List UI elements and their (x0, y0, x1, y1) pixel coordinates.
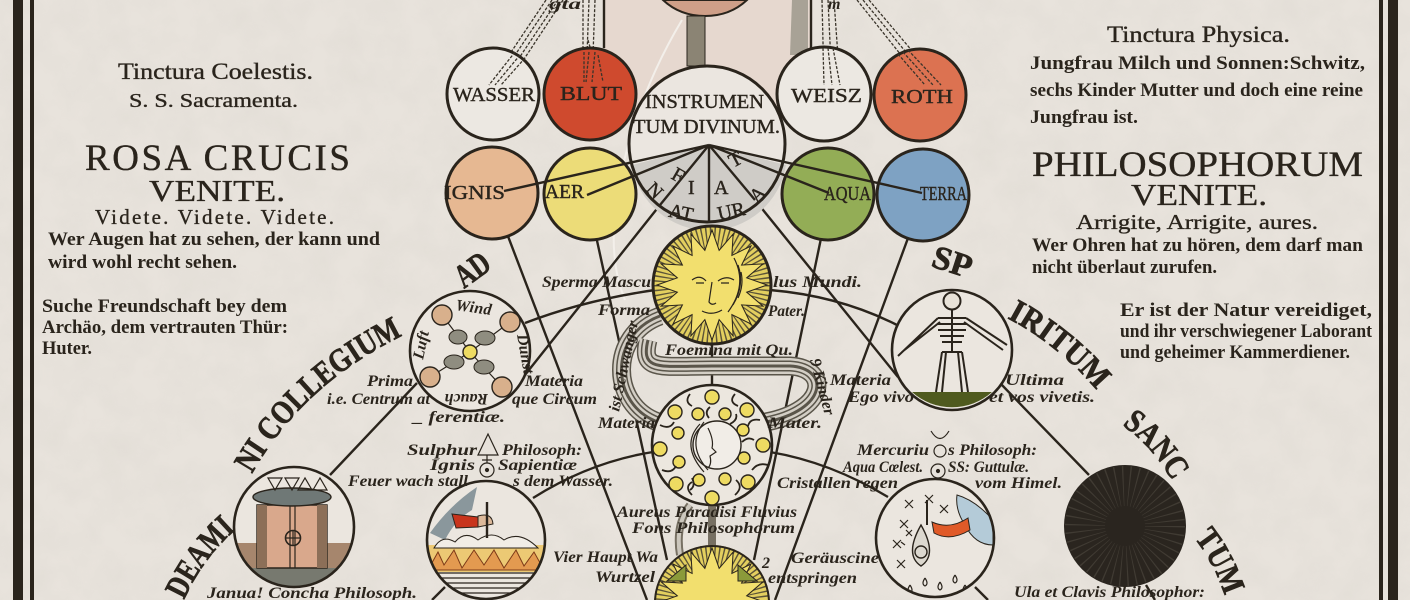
FIAT NATURA letters: T (725, 147, 746, 172)
text block: Wer Ohren: nicht überlaut zurufen. (1032, 257, 1217, 278)
double border right (1379, 0, 1398, 600)
neck column (687, 16, 705, 66)
text block: Jungfrau Milch: Jungfrau Milch und Sonnen:Schwitz, (1030, 53, 1365, 74)
heading: Tinctura Physica: Tinctura Physica. (1107, 22, 1290, 47)
labels at the skeleton circle: Ego vivo (847, 389, 914, 406)
text block: Er ist der Natur (1120, 300, 1373, 363)
top row circle: WASSER (447, 48, 539, 140)
FIAT NATURA letters: N (641, 178, 667, 204)
labels at the mercury symbol (777, 442, 1062, 492)
torso hatching (790, 0, 808, 55)
line: Arrigite: Arrigite, Arrigite, aures. (1076, 210, 1318, 234)
labels at the lower sun: Geräuscine (791, 550, 879, 567)
text block: Wer Ohren (1032, 235, 1363, 278)
labels near the upper sun: Pater. (767, 303, 805, 320)
skeleton circle (892, 290, 1012, 410)
inscription INSTRUMENTUM DIVINUM: INSTRUMEN (645, 91, 764, 113)
top row circle: WEISZ (777, 47, 871, 141)
text block: Wer Augen (48, 229, 380, 273)
labels at the skeleton circle (829, 372, 1095, 406)
FIAT NATURA letters: AT (667, 200, 695, 227)
text block: Suche Freundschaft (42, 296, 288, 359)
labels along the river: ist Schwanger (606, 319, 642, 413)
FIAT NATURA letters: A (714, 177, 729, 199)
word fragment AD: AD (448, 245, 498, 295)
left text column (42, 59, 380, 359)
moon and stars circle (652, 385, 772, 505)
central circle: Instrumentum Divinum (504, 66, 922, 231)
text block: Wer Augen: Wer Augen hat zu sehen, der kann und (48, 229, 380, 250)
labels near the upper sun: Forma (597, 302, 650, 319)
words in the wheel: Luft (410, 329, 433, 362)
top row circle: ROTH: ROTH (891, 86, 953, 108)
dashed rays from the figure (489, 0, 941, 85)
labels at the lower sun: entspringen (768, 570, 857, 587)
second row circle: IGNIS: IGNIS (444, 182, 505, 204)
falling stars (893, 495, 948, 568)
flask (912, 525, 930, 566)
labels near the upper sun: lus Mundi. (773, 274, 862, 291)
inscription INSTRUMENTUM DIVINUM: TUM DIVINUM. (633, 116, 780, 138)
labels at the sulphur symbol: Feuer wach stall (347, 473, 469, 490)
labels at the lower sun: 2 (761, 555, 770, 572)
sun face (692, 258, 742, 313)
heading: Tinctura Coelestis: Tinctura Coelestis. (118, 59, 313, 84)
stars and flask circle (876, 479, 994, 597)
labels at the lower sun: Wurtzel (595, 569, 656, 586)
labels at the skeleton circle: Materia (829, 372, 891, 389)
labels at the sulphur symbol: Ignis (429, 457, 475, 474)
red sleeve and hand (452, 514, 478, 528)
smoke (430, 487, 477, 540)
labels at the mercury symbol: Cristallen regen (777, 475, 898, 492)
title: Venite: VENITE. (149, 173, 285, 208)
central moon face (691, 421, 741, 472)
bands of the river between sun and moon (622, 316, 817, 555)
bottom sun circle (654, 545, 770, 600)
centre dot (463, 345, 477, 359)
labels at the wind circle: Materia (524, 373, 583, 390)
labels at the lower sun: Aureus Paradisi Fluvius (616, 504, 797, 521)
labels at the mercury symbol: s Philosoph: (947, 442, 1037, 459)
text block: Wer Ohren: Wer Ohren hat zu hören, dem darf man (1032, 235, 1363, 256)
connecting lines (330, 195, 1155, 600)
alchemical symbol: sulphur (478, 434, 498, 477)
text block: Jungfrau Milch: sechs Kinder Mutter und doch eine reine (1030, 80, 1363, 101)
labels at the sulphur symbol: Philosoph: (501, 442, 582, 459)
red sleeve (932, 518, 970, 537)
furnace circle (234, 467, 354, 588)
labels at the lower sun (553, 504, 879, 587)
second row circle: AQUA (782, 148, 874, 240)
word fragment SANC: SANC (1123, 410, 1189, 479)
inscription INSTRUMENTUM DIVINUM (633, 91, 780, 138)
words in the wheel: Dunst (513, 332, 537, 376)
alchemical symbol: mercury (931, 431, 949, 478)
blue cloud (957, 495, 993, 545)
second row circle: AER: AER (545, 181, 585, 203)
FIAT NATURA letters: UR (715, 198, 748, 225)
second row circle: TERRA (877, 149, 969, 241)
labels at the sulphur symbol: s dem Wasser. (512, 473, 613, 490)
top row circle: BLUT (544, 48, 636, 140)
radial hatching (668, 241, 756, 329)
central figure torso (604, 0, 811, 300)
FIAT NATURA letters: I (688, 177, 695, 199)
furnace drawing (234, 488, 354, 588)
rain drops (908, 575, 967, 593)
top row circle: WASSER: WASSER (453, 84, 536, 106)
skeleton (898, 292, 1007, 392)
labels near the upper sun: Sperma Mascu (542, 274, 651, 291)
labels at the wind circle (327, 373, 597, 426)
double border left (13, 0, 34, 600)
text block: Jungfrau Milch (1030, 53, 1365, 128)
second row circle: AQUA: AQUA (824, 183, 871, 205)
four element triangles (268, 478, 327, 490)
labels at the sulphur symbol: Sulphur (407, 442, 478, 459)
title: Rosa Crucis: ROSA CRUCIS (85, 138, 350, 179)
fire and dagger circle (427, 481, 545, 599)
labels at the sulphur symbol (347, 442, 613, 490)
labels at the mercury symbol: Aqua Cœlest. (842, 459, 923, 476)
word fragment SP: SP (928, 239, 977, 286)
line: Videte: Videte. Videte. Videte. (95, 205, 334, 229)
labels along the river: Mater. (767, 415, 822, 432)
text block: Jungfrau Milch: Jungfrau ist. (1030, 107, 1138, 128)
labels at the mercury symbol: Mercuriu (856, 442, 929, 459)
labels at the wind circle: i.e. Centrum at (327, 391, 431, 408)
white cloud band (434, 535, 538, 548)
top row circle: WEISZ: WEISZ (791, 85, 862, 107)
labels near the upper sun (542, 274, 862, 320)
flames (428, 545, 544, 572)
second row circle: AER (544, 148, 636, 240)
labels at the lower sun: Vier Haupt Wa (553, 549, 658, 566)
labels along the river (597, 319, 838, 432)
second row circle: IGNIS (444, 147, 538, 239)
green ground (912, 392, 992, 407)
FIAT NATURA letters: A (745, 181, 771, 208)
top row circle: ROTH (874, 49, 966, 141)
curved inscription: ad spiritum sanctum (164, 199, 1246, 600)
wind circle (410, 291, 537, 411)
sun rays (657, 230, 767, 340)
subheading: S. S. Sacramenta: S. S. Sacramenta. (129, 90, 298, 112)
labels at the skeleton circle: Ultima (1005, 372, 1064, 389)
title: Venite right: VENITE. (1131, 177, 1267, 212)
outer ring of dots (653, 390, 770, 505)
right text column (1030, 22, 1373, 363)
labels along the river: 9 Kinder (806, 357, 838, 418)
labels along the river: Materia (597, 415, 655, 432)
text block: Er ist der Natur: und ihr verschwiegener Laborant (1120, 321, 1373, 342)
black circle (1064, 465, 1186, 587)
words in the wheel: Wind (455, 297, 494, 319)
FIAT NATURA letters: F (668, 163, 688, 188)
text block: Wer Augen: wird wohl recht sehen. (48, 252, 237, 273)
title: Philosophorum: PHILOSOPHORUM (1032, 144, 1363, 184)
labels at the lower sun: Fons Philosophorum (631, 520, 795, 537)
labels along the river: Foemina mit Qu. (664, 342, 793, 359)
labels at the mercury symbol: SS: Guttulæ. (948, 459, 1029, 476)
words in the wheel: Rauch (444, 390, 489, 407)
inner ring of dots (672, 408, 750, 486)
second row circle: TERRA: TERRA (920, 183, 967, 205)
word fragment NI COLLEGIUM: NI COLLEGIUM (233, 316, 402, 474)
labels at the wind circle: Prima (366, 373, 413, 390)
labels at the sulphur symbol: Sapientiæ (498, 457, 578, 474)
sun circle (653, 226, 771, 344)
FIAT NATURA letters (641, 147, 771, 227)
text block: Suche Freundschaft: Suche Freundschaft bey dem (42, 296, 287, 317)
words in the wheel (410, 297, 537, 407)
four wind heads (420, 305, 520, 397)
labels at the wind circle: _ ferentiæ. (410, 409, 505, 426)
text block: Er ist der Natur: Er ist der Natur vereidiget, (1120, 300, 1372, 321)
labels at the skeleton circle: et vos vivetis. (989, 389, 1095, 406)
script labels around the diagram (206, 274, 1205, 600)
crescents between the dots (660, 394, 768, 495)
text block: Suche Freundschaft: Huter. (42, 338, 92, 359)
word fragment IRITUM: IRITUM (1008, 299, 1113, 390)
text block: Suche Freundschaft: Archäo, dem vertrauten Thür: (42, 317, 288, 338)
labels at the mercury symbol: vom Himel. (975, 475, 1062, 492)
text block: Er ist der Natur: und geheimer Kammerdiener. (1120, 342, 1350, 363)
spokes and clouds (430, 315, 510, 387)
top row circle: BLUT: BLUT (560, 83, 622, 105)
bowl at the figure's waist (663, 0, 747, 16)
labels at the wind circle: que Circum (512, 391, 597, 408)
fan of lines to the elements (504, 145, 922, 222)
water lines (428, 573, 544, 593)
